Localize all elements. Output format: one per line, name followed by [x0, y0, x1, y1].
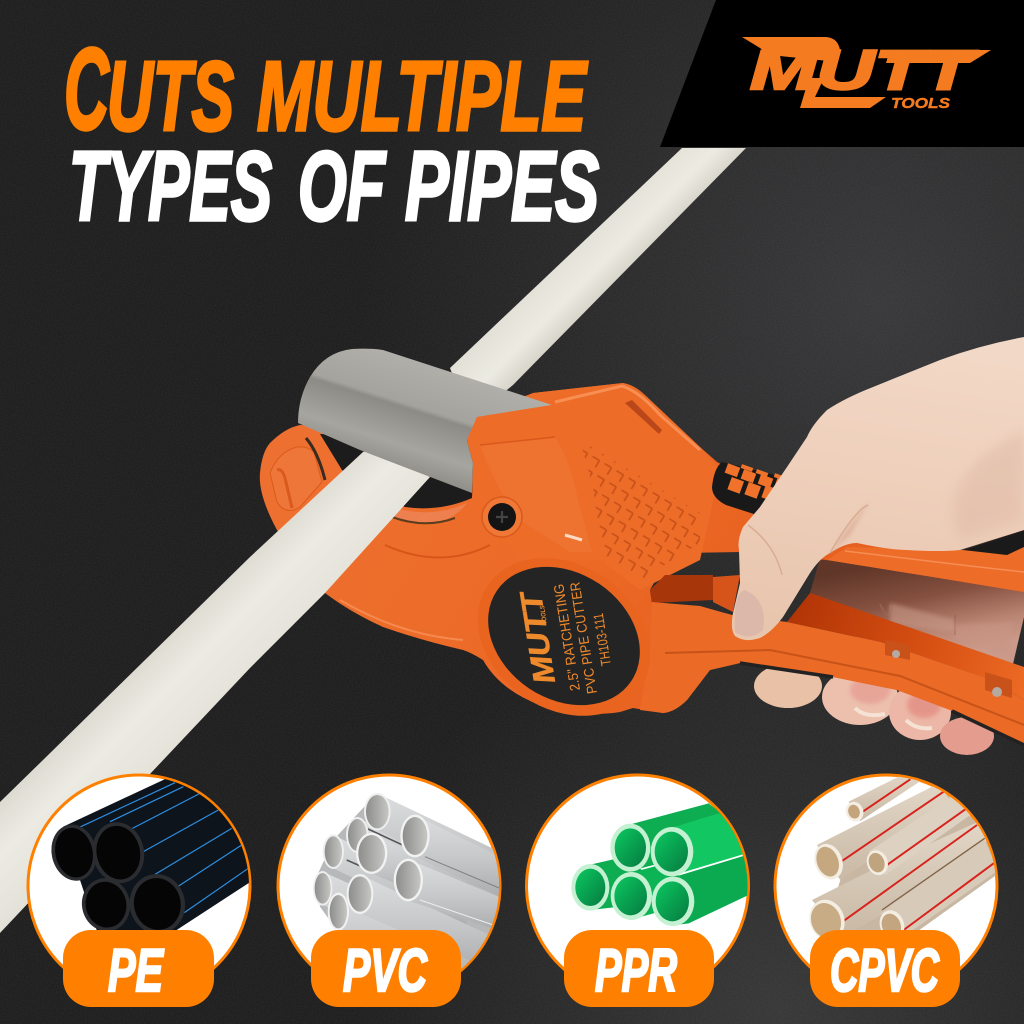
pill: PE	[63, 930, 214, 1007]
circle	[775, 775, 997, 997]
pipes: PPR	[571, 803, 752, 926]
blade	[298, 349, 552, 493]
hand shading	[953, 430, 1024, 540]
pill: PPR	[564, 930, 714, 1007]
disc text	[550, 581, 614, 695]
pill: CPVC: CPVC	[830, 937, 940, 1004]
logo: Mutt Tools: MUTT	[750, 38, 979, 101]
hand: palm and thumb	[732, 337, 1024, 640]
logo: Mutt Tools	[742, 37, 991, 112]
pill: PVC	[311, 930, 461, 1007]
white pipe rear section	[450, 148, 746, 420]
title line 1: UTS	[107, 41, 234, 151]
black label disc: TOOLS	[539, 604, 549, 625]
circle	[526, 775, 748, 997]
title line 2: PIPES	[405, 131, 599, 241]
jaw left lobe	[270, 447, 322, 511]
black label disc	[447, 526, 681, 748]
title line 1: C	[64, 24, 110, 154]
pipe cutter and hand	[0, 148, 1024, 933]
circle	[278, 775, 500, 997]
cutter body	[260, 383, 1024, 743]
upper handle grip	[712, 462, 788, 516]
lower handle	[640, 575, 1024, 745]
pill: CPVC	[810, 930, 960, 1007]
logo banner	[660, 0, 1024, 147]
title line 1: MULTIPLE	[257, 41, 588, 151]
grip texture	[580, 440, 700, 580]
panel: CPVC	[775, 775, 999, 1007]
cutter upper plate	[467, 383, 720, 590]
pipes: CPVC	[804, 775, 999, 945]
title line 2	[69, 131, 599, 241]
title line 2: TYPES	[69, 131, 272, 241]
rear fingers	[754, 558, 1024, 755]
disc logo: MUTT	[514, 587, 562, 686]
pipes: PVC	[313, 793, 499, 969]
white pipe front section	[0, 451, 430, 933]
jaw crescent	[388, 503, 467, 524]
disc text: 2.5" RATCHETING	[550, 583, 583, 692]
panel: PPR	[526, 775, 752, 1007]
jaw opening	[320, 434, 480, 508]
pipes: PE	[51, 779, 249, 930]
pill: PVC: PVC	[343, 937, 428, 1004]
upper handle tip	[827, 530, 1024, 592]
title line 2: OF	[298, 131, 386, 241]
circle	[28, 775, 250, 997]
logo: Mutt Tools: TOOLS	[891, 95, 950, 112]
disc text: PVC PIPE CUTTER	[566, 581, 600, 695]
pill: PPR: PPR	[595, 937, 677, 1004]
title	[64, 24, 599, 241]
screw	[482, 497, 522, 537]
panel: PVC	[278, 775, 507, 1007]
disc text: TH103-111	[590, 612, 614, 667]
panel: PE	[28, 775, 253, 1007]
pill: PE: PE	[108, 937, 164, 1004]
title line 1	[64, 24, 588, 154]
